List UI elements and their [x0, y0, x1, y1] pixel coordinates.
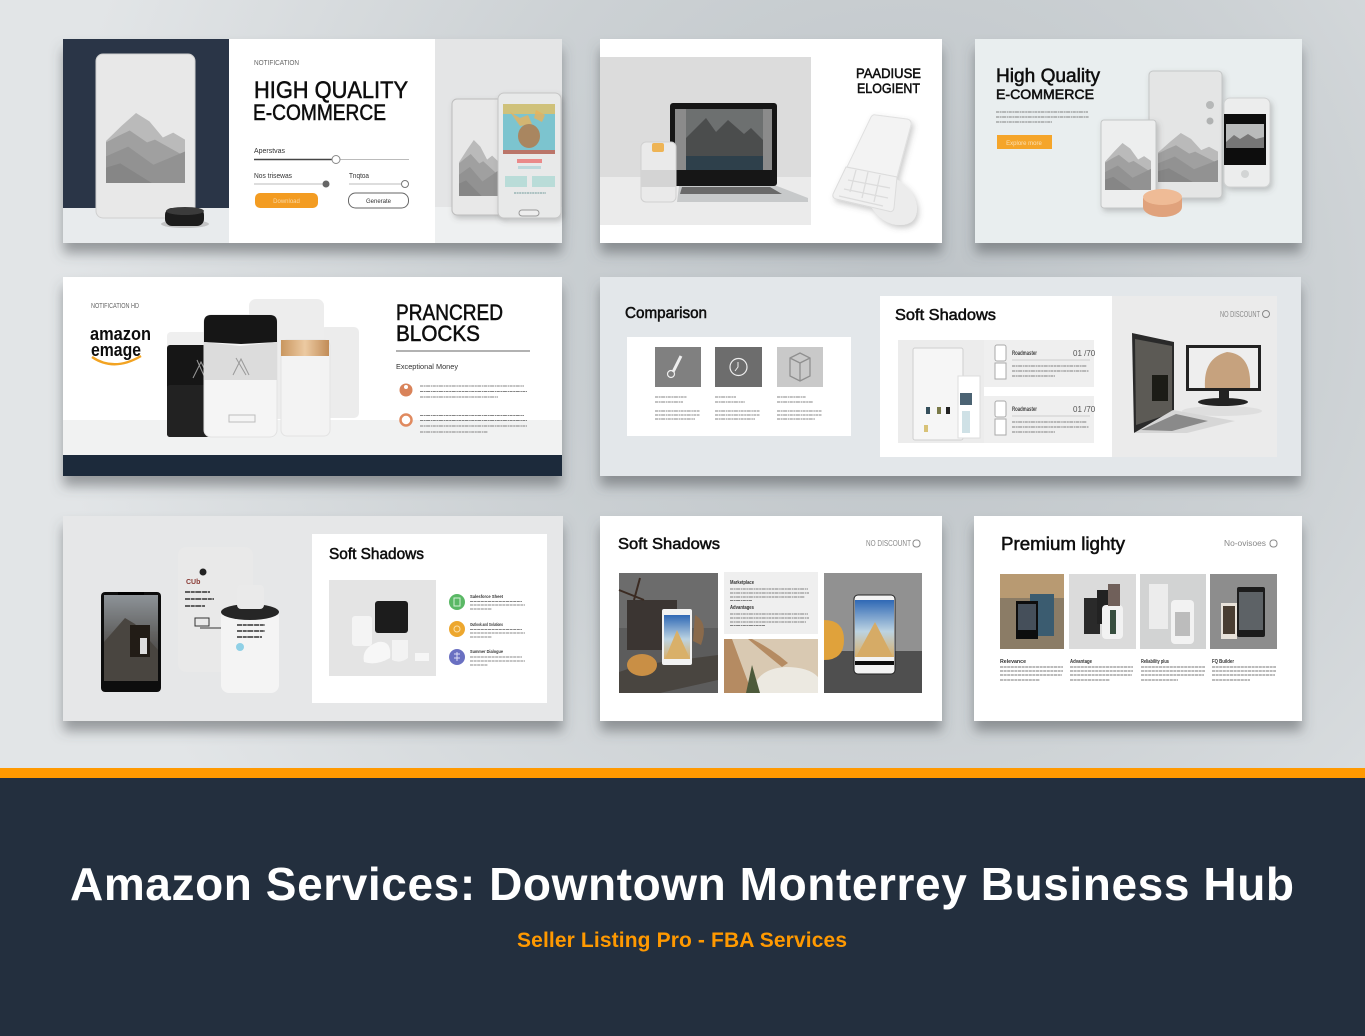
panel: phone and bottles with soft shadows: [63, 516, 563, 721]
column: photo four: [1210, 574, 1277, 680]
product: phone: [101, 592, 161, 692]
list item: green: [449, 594, 525, 610]
panel: amazon image and blocks: [63, 277, 562, 476]
product: desktop monitor: [1182, 345, 1262, 416]
logo: amazon emage: amazon: [90, 324, 151, 344]
product: black ring: [161, 207, 209, 228]
panel: premium lighty: [974, 516, 1302, 721]
button: orange: [997, 135, 1052, 149]
subtitle: Seller Listing Pro - FBA Services: [517, 929, 847, 952]
button: orange: Explore more: [1006, 141, 1042, 147]
heading: soft shadows: Soft Shadows: [618, 536, 720, 553]
logo: amazon emage: [90, 324, 151, 364]
heading: soft shadows: Soft Shadows: [329, 546, 424, 563]
heading: high quality e-commerce: E-COMMERCE: [253, 100, 386, 125]
logo: amazon emage: emage: [91, 340, 141, 360]
tablet app screenshot: [898, 340, 984, 443]
heading: prancred blocks: [396, 300, 503, 346]
slider: aperstvas: Aperstvas: [254, 148, 285, 155]
right image area: [435, 39, 562, 243]
product: laptop: [670, 103, 808, 202]
heading: prancred blocks: PRANCRED: [396, 300, 503, 325]
column one: [655, 347, 701, 419]
text card: [724, 572, 818, 634]
heading: high quality e-commerce: High Quality: [996, 66, 1100, 87]
list item: purple: [449, 649, 525, 665]
product: left phone: [1101, 120, 1156, 208]
panel: high quality devices: [975, 39, 1302, 243]
floor and navy strip: [63, 420, 562, 476]
product: front cylinder: [221, 585, 279, 693]
subheading: Exceptional Money: [396, 364, 459, 371]
product: cylinder with copper band: [281, 340, 330, 436]
title: Amazon Services: Downtown Monterrey Business Hub: [70, 858, 1294, 910]
label: no-ovisoes: No-ovisoes: [1224, 539, 1266, 548]
panel: comparison and soft shadows: [600, 277, 1301, 476]
column: photo two: [1069, 574, 1136, 680]
photo: hands and white bag: [724, 639, 818, 693]
heading: high quality e-commerce: HIGH QUALITY: [254, 77, 408, 104]
button: outline: [348, 193, 408, 208]
row two: Roadmaster: [1012, 407, 1037, 413]
heading: premium lighty: Premium lighty: [1001, 534, 1125, 554]
heading: high quality e-commerce: [996, 66, 1100, 102]
navy backdrop with floor: [63, 39, 229, 243]
button: orange: [255, 193, 318, 208]
panel: high quality e-commerce: [63, 39, 562, 243]
heading: high quality e-commerce: E-COMMERCE: [996, 86, 1094, 102]
heading: high quality e-commerce: [253, 77, 408, 125]
product photo: [329, 580, 436, 676]
page background: [0, 0, 1365, 768]
panel: laptop and keypad: [600, 39, 942, 243]
list item: purple: Summer Dialogue: [470, 649, 503, 654]
inner white panel: [880, 296, 1112, 457]
body text: [996, 112, 1089, 122]
product: rear white bottle: CUb: [186, 579, 200, 586]
list item: green: Salesforce Sheet: [470, 594, 503, 599]
column three: [777, 347, 823, 419]
product: rear white bottle: [178, 547, 253, 672]
row two: [984, 396, 1096, 443]
column: photo one: Relevance: [1000, 659, 1026, 665]
slider: aperstvas: [254, 148, 409, 164]
text card: Advantages: [730, 605, 754, 611]
heading: prancred blocks: BLOCKS: [396, 321, 480, 346]
heading: soft shadows: Soft Shadows: [895, 307, 996, 324]
heading: paadiuse elogient: ELOGIENT: [857, 80, 920, 96]
slider: tnqtoa: Tnqtoa: [349, 173, 369, 180]
product: black device: [167, 332, 212, 437]
row one: [984, 340, 1096, 387]
slider: nos trisewas: [254, 173, 330, 188]
heading: paadiuse elogient: [856, 65, 921, 96]
column: photo three: Reliability plus: [1141, 659, 1169, 665]
product: right phone: [1224, 98, 1270, 187]
photo: phone on grey backdrop: [824, 573, 922, 693]
product: laptop: [1132, 333, 1235, 433]
product: peach puck: [1143, 189, 1182, 217]
product: tablet with mountain image: [96, 54, 195, 218]
list item: orange: [449, 621, 525, 637]
grey photo backdrop: [600, 57, 811, 225]
text card: Marketplace: [730, 580, 754, 586]
product: keypad device on stand: [833, 115, 917, 225]
list item: orange: Outlook and Solutions: [470, 622, 503, 627]
footer banner: [0, 768, 1365, 1036]
heading: comparison: Comparison: [625, 305, 707, 322]
label: notification: NOTIFICATION: [254, 60, 299, 67]
photo: phone on slate with shell: [619, 573, 718, 693]
label: no downloads: NO DISCOUNT: [1220, 310, 1260, 319]
row one: Roadmaster: [1012, 351, 1037, 357]
column: photo four: FQ Builder: [1212, 659, 1234, 665]
product: central white device: [204, 315, 277, 437]
column: photo one: [1000, 574, 1064, 680]
product: large tablet: [1149, 71, 1222, 198]
row one: 01 /70: [1073, 349, 1096, 358]
column two: [715, 347, 762, 419]
slider: nos trisewas: Nos trisewas: [254, 173, 292, 180]
slider: tnqtoa: [349, 173, 408, 188]
product: back white panels: [249, 299, 359, 419]
row two: 01 /70: [1073, 405, 1096, 414]
column: photo two: Advantage: [1070, 659, 1092, 665]
button: orange: Download: [273, 199, 300, 205]
panel: soft shadows gallery: [600, 516, 942, 721]
comparison table card: [627, 337, 851, 436]
product: rear tablet: [452, 99, 504, 215]
feature two: [400, 414, 527, 432]
label: no discount: NO DISCOUNT: [866, 539, 911, 548]
inner white card: [312, 534, 547, 703]
feature one: [400, 384, 527, 397]
heading: paadiuse elogient: PAADIUSE: [856, 65, 921, 81]
label: notification: NOTIFICATION HD: [91, 303, 139, 310]
button: outline: Generate: [366, 199, 392, 205]
product: white jar with orange lid: [641, 142, 676, 202]
right image area: [1112, 296, 1277, 457]
column: photo three: [1140, 574, 1206, 680]
product: phone with colourful app: [498, 93, 561, 218]
